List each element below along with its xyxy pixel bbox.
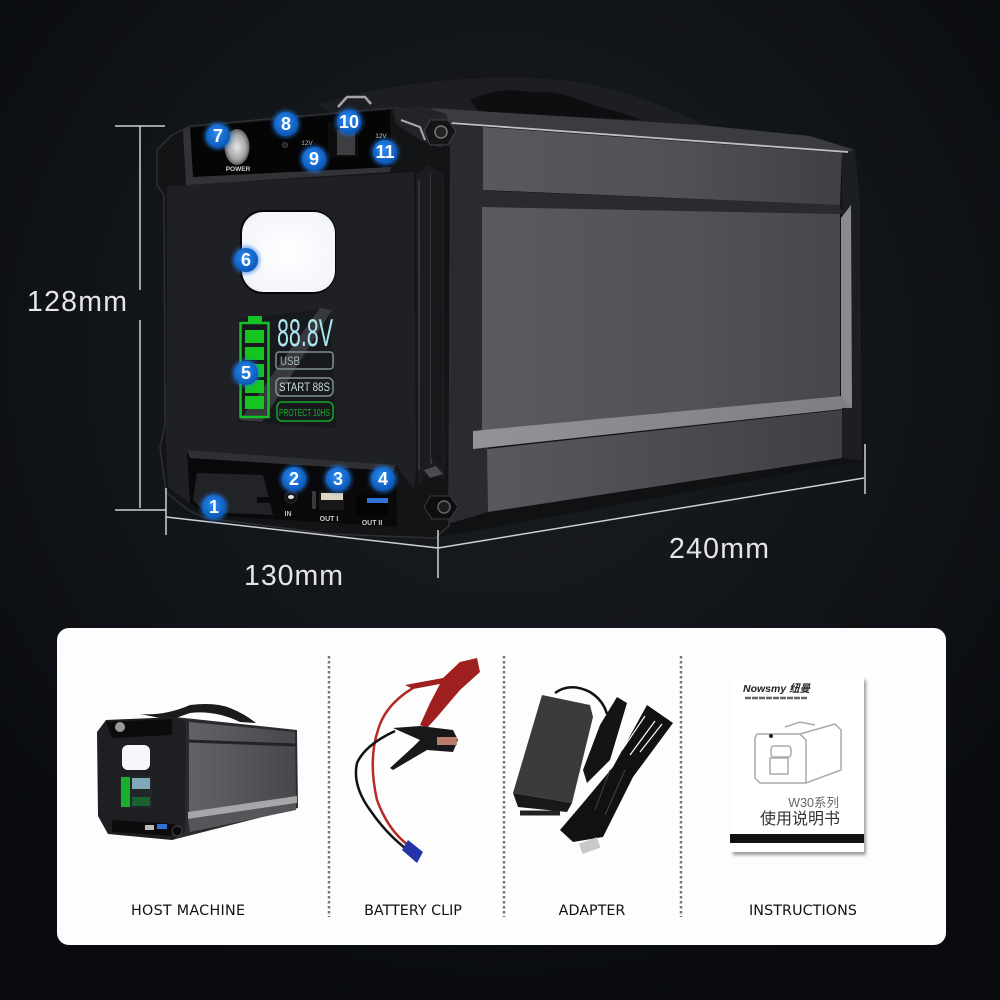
dimension label: height: 128mm (27, 286, 127, 318)
numbered badges (200, 108, 399, 521)
badge 3: 3 (333, 469, 343, 489)
mic hole (282, 142, 288, 148)
badge 6 (232, 246, 260, 274)
top corner wedge (393, 106, 452, 148)
badge 2: 2 (289, 469, 299, 489)
item: instruction manual: 使用说明书 (760, 810, 840, 828)
item: instruction manual: Nowsmy 纽曼 (743, 682, 811, 695)
USB row (276, 352, 333, 369)
top recess (190, 110, 391, 177)
badge 8: 8 (281, 114, 291, 134)
bottom ports (193, 473, 273, 515)
side groove (470, 190, 842, 214)
right pillar of front (416, 165, 445, 488)
corner screw bottom (424, 496, 458, 519)
badge 11: 11 (375, 142, 395, 162)
caption: host machine: HOST MACHINE (131, 903, 245, 919)
product: power station main view: 12V (301, 140, 313, 147)
item: adapter (513, 687, 673, 854)
panel: package contents (57, 628, 946, 945)
silver stripe (473, 396, 852, 449)
protect row (277, 402, 333, 421)
badge 5: 5 (241, 363, 251, 383)
product: power station main view: 12V (375, 133, 387, 140)
battery gauge (240, 316, 268, 417)
badge 6: 6 (241, 250, 251, 270)
badge 1: 1 (209, 497, 219, 517)
product: power station main view: OUT I (320, 516, 338, 523)
switch (328, 123, 358, 157)
caption: instructions: INSTRUCTIONS (749, 903, 857, 919)
LCD display: USB (280, 354, 300, 368)
right pillar (842, 150, 862, 460)
work lamp (240, 210, 336, 294)
badge 10 (335, 108, 363, 136)
badge 4: 4 (378, 469, 388, 489)
caption: battery clip: BATTERY CLIP (364, 903, 462, 919)
side lower panel (487, 409, 850, 512)
small labels: POWER (226, 166, 251, 173)
bottom recess (187, 450, 397, 527)
LCD display: PROTECT 10HS (279, 407, 330, 419)
badge 3 (324, 465, 352, 493)
dashed dividers (329, 656, 681, 917)
side main panel (482, 207, 840, 431)
product: power station main view: IN (284, 511, 292, 518)
dimension label: length: 240mm (669, 533, 769, 565)
badge 7 (204, 122, 232, 150)
top highlight (450, 123, 848, 152)
badge 9: 9 (309, 149, 319, 169)
handle (318, 78, 706, 130)
badge 7: 7 (213, 126, 223, 146)
badge 4 (369, 465, 397, 493)
item: host machine (97, 704, 298, 840)
corner screw top (424, 120, 456, 145)
badge 5 (232, 359, 260, 387)
start row (276, 378, 333, 396)
front face (166, 172, 416, 503)
dimension lines (115, 126, 865, 578)
badge 2 (280, 465, 308, 493)
badge 1 (200, 493, 228, 521)
item: battery clip (356, 658, 480, 863)
badge 11 (371, 138, 399, 166)
LCD display (238, 308, 336, 428)
side casing (440, 112, 864, 537)
manual line art (755, 722, 841, 783)
power knob (224, 129, 250, 165)
item: instruction manual: W30系列 (788, 796, 839, 810)
badge 10: 10 (339, 112, 359, 132)
dimension label: depth: 130mm (244, 560, 343, 592)
badge 9 (300, 145, 328, 173)
front outer frame (157, 108, 451, 538)
voltage readout: 88.8V (277, 312, 333, 355)
handle clip (338, 97, 371, 107)
product: power station main view (157, 78, 864, 538)
badge 8 (272, 110, 300, 138)
item: instruction manual (730, 677, 866, 855)
LCD display: START 88S (279, 380, 330, 394)
product: power station main view: OUT II (362, 520, 382, 527)
caption: adapter: ADAPTER (559, 903, 625, 919)
